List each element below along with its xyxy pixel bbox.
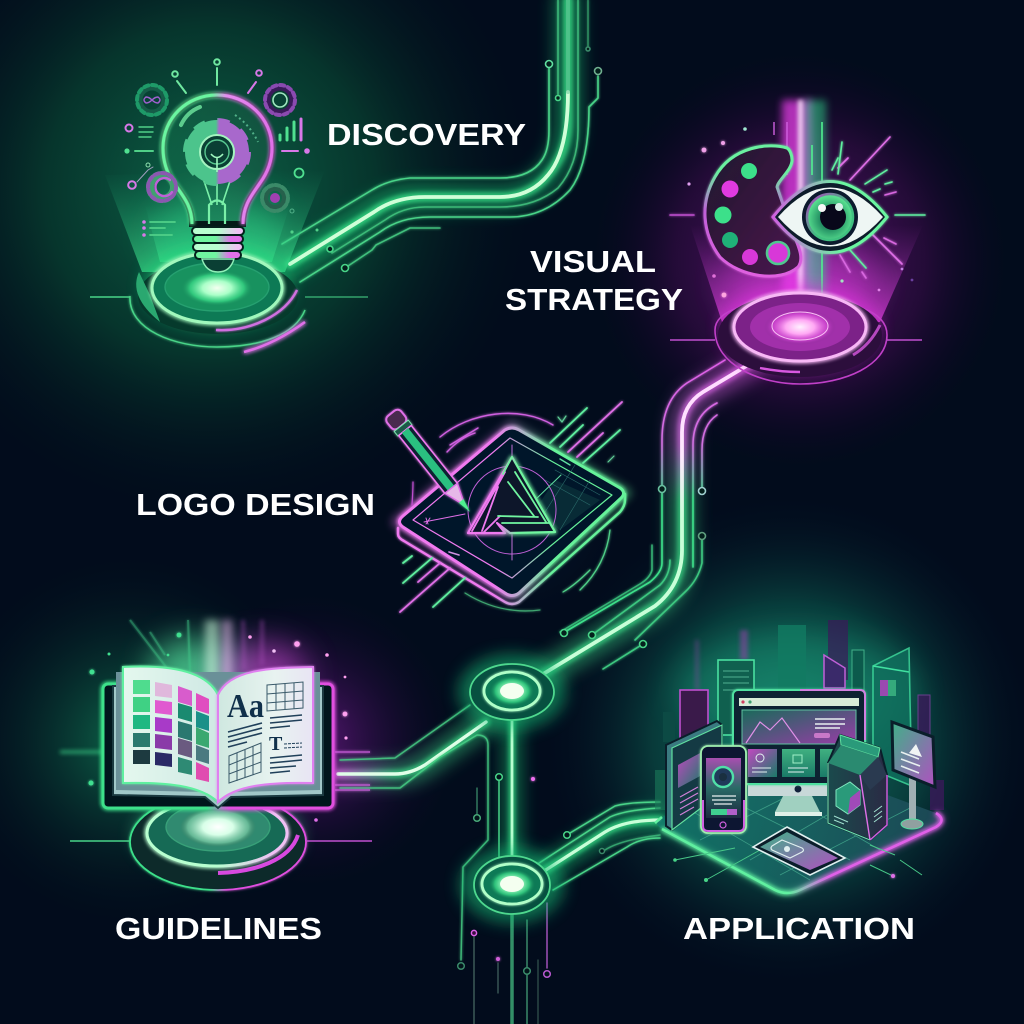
isometric floor (655, 758, 942, 893)
icon: desktop monitor (733, 690, 865, 816)
tablet (398, 427, 625, 604)
icon: signpost (892, 722, 935, 829)
panel: visual strategy icon (670, 100, 925, 384)
platform (90, 245, 368, 352)
sparkles (702, 148, 706, 152)
connector: hub vertical (458, 715, 550, 1024)
title: discovery: DISCOVERY (327, 117, 526, 152)
title: logo design: LOGO DESIGN (136, 487, 375, 522)
construction circle (468, 445, 561, 560)
icon: brochure (666, 721, 722, 830)
icon: palette (705, 146, 801, 276)
icon: open book (103, 667, 333, 808)
connector: hub to application (533, 802, 660, 890)
title: visual strategy (505, 244, 683, 317)
satellite icons: gears, charts, lists (124, 59, 319, 237)
platform (670, 284, 922, 384)
typography sample: T (269, 733, 283, 755)
gear (188, 123, 246, 181)
title: guidelines: GUIDELINES (115, 911, 322, 946)
typography sample: Aa (227, 688, 264, 725)
connector: guidelines to hub (338, 705, 488, 960)
burst rays (60, 620, 370, 822)
panel: logo design icon (384, 402, 625, 612)
icon: eye (773, 182, 887, 252)
icon: floor tablet (753, 827, 845, 875)
icon: smartphone (701, 746, 746, 833)
platform (70, 791, 372, 890)
junction node: upper hub (458, 654, 566, 730)
title: application: APPLICATION (683, 911, 915, 946)
city skyline (655, 620, 944, 810)
connector network (282, 0, 753, 1024)
rays (670, 137, 925, 278)
icon: impossible triangle logo (468, 457, 555, 533)
junction node: lower hub (460, 847, 564, 923)
panel: guidelines icon (60, 620, 372, 890)
rays and arcs (400, 402, 622, 612)
filament (202, 150, 232, 224)
icon: pencil (384, 408, 477, 517)
light cones and beams (670, 100, 925, 330)
title: visual strategy: STRATEGY (505, 282, 683, 317)
colour swatches (133, 680, 209, 782)
light cones (105, 170, 325, 280)
connector: discovery to visual strategy corner (282, 0, 602, 282)
panel: discovery icon (60, 59, 944, 946)
connector: visual strategy to hub (530, 360, 753, 682)
typography sample (227, 682, 303, 783)
icon: packaging box (828, 735, 887, 840)
panel: application icon (655, 620, 944, 893)
title: visual strategy: VISUAL (530, 244, 656, 279)
icon: light bulb (163, 95, 272, 272)
screw base (192, 227, 244, 272)
